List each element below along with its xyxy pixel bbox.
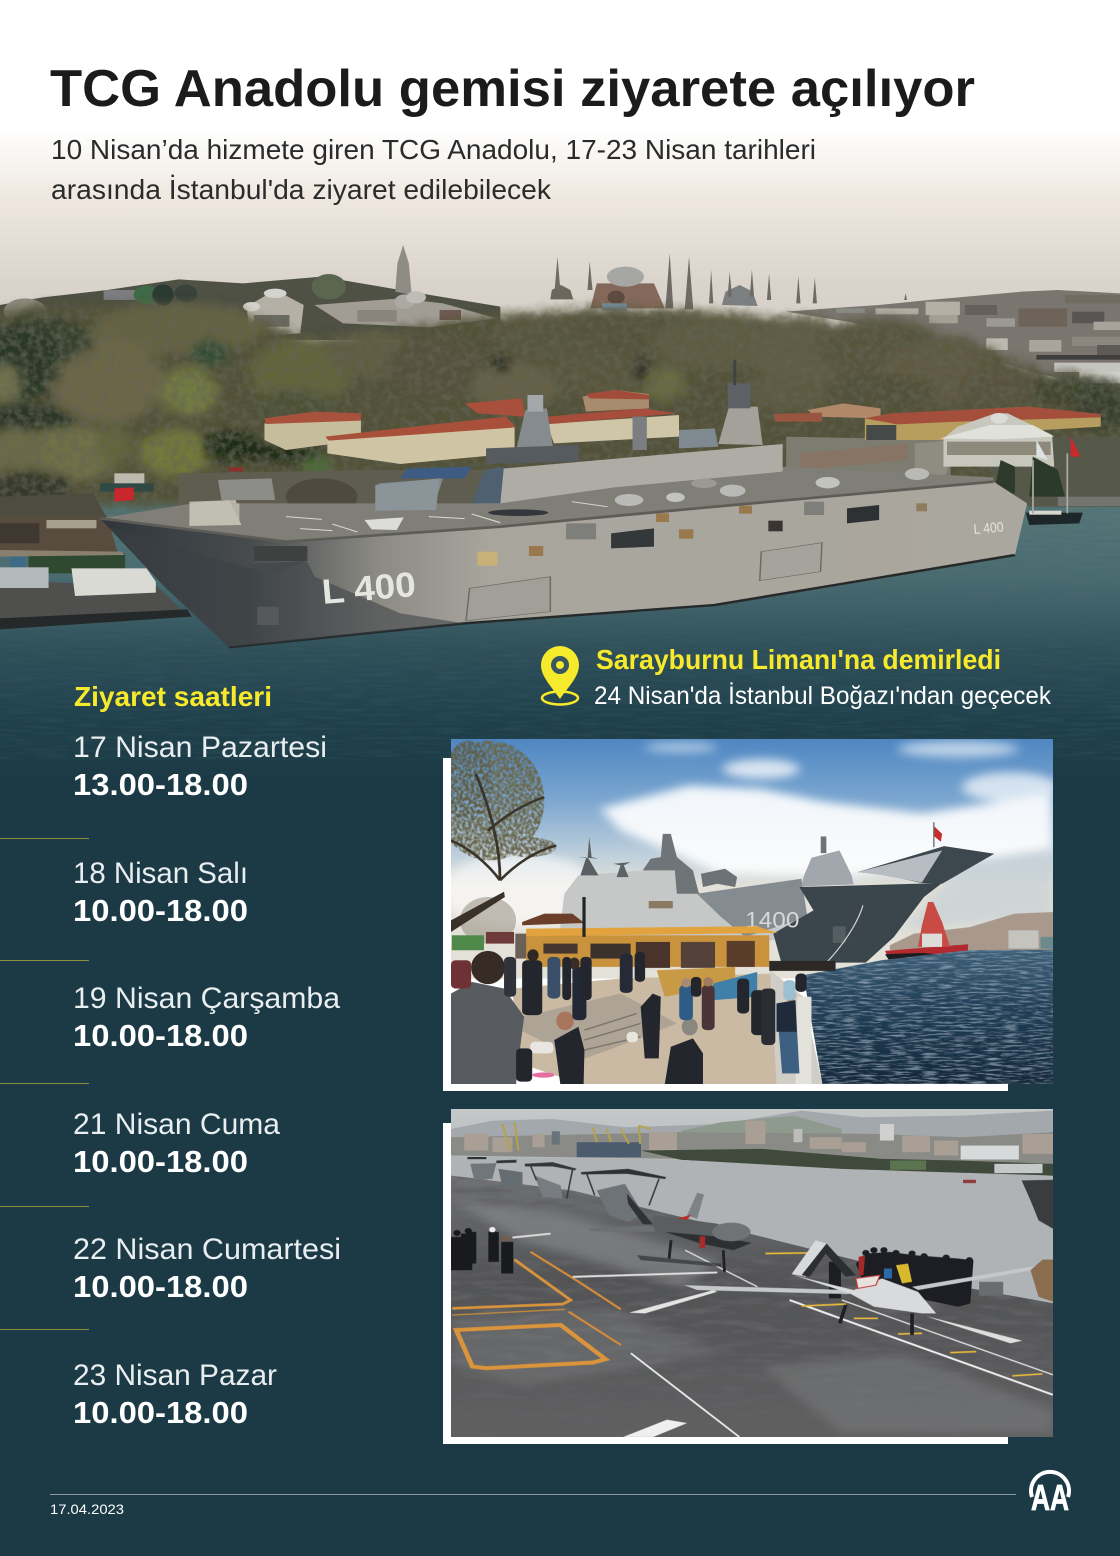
17 April hours: 13.00-18.00 — [73, 767, 248, 802]
water and dark teal background — [0, 490, 1120, 1556]
title: TCG Anadolu gemisi ziyarete açılıyor — [50, 60, 975, 118]
22 April hours: 10.00-18.00 — [73, 1269, 248, 1304]
18 April hours: 18 Nisan Salı — [73, 857, 248, 890]
19 April hours — [73, 982, 340, 1053]
boat at the pier — [1026, 453, 1083, 525]
visiting hours list — [73, 731, 341, 1430]
wooded park — [0, 303, 1120, 507]
red-roofed waterfront buildings — [264, 390, 1120, 506]
orange quay building — [515, 897, 777, 968]
22 April hours: 22 Nisan Cumartesi — [73, 1233, 341, 1266]
distant city shore — [451, 1121, 1053, 1175]
hazy sky and hills — [451, 1109, 1053, 1175]
18 April hours: 10.00-18.00 — [73, 893, 248, 928]
ship hull — [100, 482, 1027, 647]
water ripples — [0, 490, 1120, 760]
aircraft on deck — [286, 468, 929, 532]
location callout — [594, 644, 1051, 710]
ship bow and ramp — [773, 822, 994, 964]
main photo: TCG Anadolu at Sarayburnu — [0, 245, 1120, 648]
18 April hours — [73, 857, 248, 928]
far shore city — [890, 912, 1053, 950]
quay walkway and steps — [512, 961, 836, 1084]
location callout: Sarayburnu Limanı'na demirledi — [596, 644, 1001, 675]
flight deck and islands — [100, 360, 993, 543]
Bayraktar drone — [684, 1240, 1041, 1335]
19 April hours: 19 Nisan Çarşamba — [73, 982, 340, 1015]
icon: location pin — [541, 646, 579, 704]
21 April hours: 10.00-18.00 — [73, 1144, 248, 1179]
old city houses — [783, 290, 1120, 390]
hull number on the bow: L 400 — [320, 565, 417, 612]
hull number at the stern: L 400 — [973, 518, 1004, 537]
17 April hours — [73, 731, 327, 802]
logo: AA — [1031, 1472, 1069, 1518]
hull openings — [236, 502, 927, 625]
helicopters — [467, 1157, 666, 1224]
date: 17.04.2023 — [50, 1501, 124, 1517]
19 April hours: 10.00-18.00 — [73, 1018, 248, 1053]
open water — [803, 950, 1053, 1084]
journalists group — [829, 1247, 973, 1307]
harbour-side land — [0, 437, 1120, 629]
logo: AA: AA — [1031, 1477, 1069, 1518]
visitors and anglers — [451, 949, 807, 1084]
sky and clouds — [440, 739, 1059, 979]
photo: aircraft on the flight deck — [451, 1109, 1053, 1437]
wet flight deck — [451, 1175, 1053, 1437]
heading: visiting hours: Ziyaret saatleri — [74, 681, 272, 712]
subtitle: arasında İstanbul'da ziyaret edilebilecek — [51, 174, 552, 205]
21 April hours: 21 Nisan Cuma — [73, 1108, 280, 1141]
ship superstructure — [560, 834, 807, 944]
deck markings — [452, 1234, 1053, 1437]
footer rule — [50, 1494, 1016, 1495]
deck reflections — [452, 1200, 1053, 1433]
23 April hours — [73, 1359, 277, 1430]
photo: ship at the quay with visitors — [451, 739, 1053, 1084]
tugboat — [885, 902, 968, 961]
21 April hours — [73, 1108, 280, 1179]
photo frame: white offset 1 — [443, 758, 1008, 1091]
22 April hours — [73, 1233, 341, 1304]
water surface — [0, 490, 1120, 780]
moored ship and buoy — [963, 1180, 1053, 1302]
officers on deck — [451, 1227, 513, 1273]
location callout: 24 Nisan'da İstanbul Boğazı'ndan geçecek — [594, 681, 1051, 710]
bay water — [451, 1157, 1053, 1303]
historic skyline — [0, 245, 1120, 390]
ship hull number: 1400 — [745, 908, 799, 933]
subtitle: 10 Nisan’da hizmete giren TCG Anadolu, 17-23 Nisan tarihleri — [51, 134, 816, 165]
sky background — [0, 0, 1120, 520]
photo frame: white offset 2 — [443, 1123, 1008, 1444]
23 April hours: 10.00-18.00 — [73, 1395, 248, 1430]
grey jet drone — [589, 1193, 751, 1272]
23 April hours: 23 Nisan Pazar — [73, 1359, 277, 1392]
17 April hours: 17 Nisan Pazartesi — [73, 731, 327, 764]
subtitle — [51, 134, 816, 205]
tree — [436, 741, 556, 950]
